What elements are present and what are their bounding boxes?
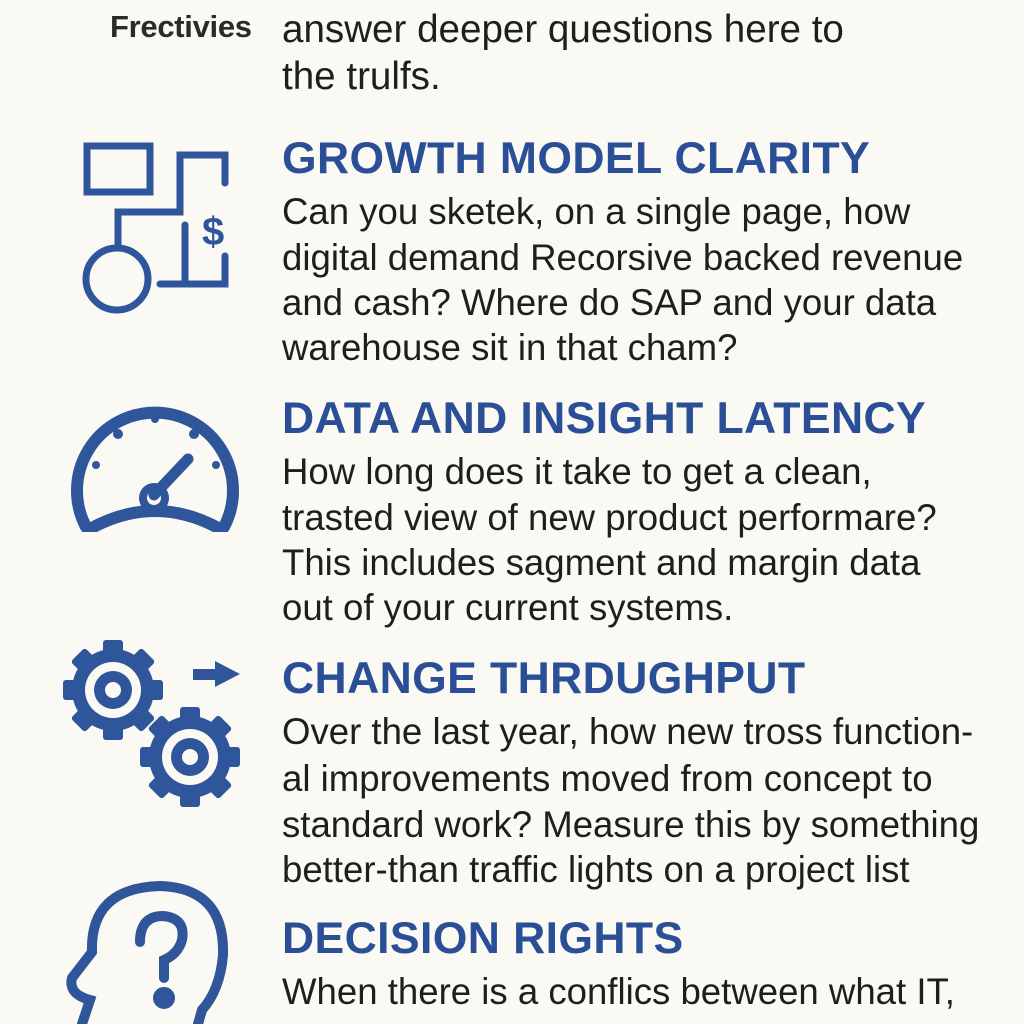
icon: gears with arrow xyxy=(63,640,240,807)
body text xyxy=(282,711,979,890)
icon: growth model diagram xyxy=(82,142,228,314)
icon: growth model diagram: $ xyxy=(202,210,224,254)
intro text: answer deeper questions here to xyxy=(282,8,844,51)
body text: standard work? Measure this by something xyxy=(282,804,979,845)
body text: Can you sketek, on a single page, how xyxy=(282,191,910,232)
body text: When there is a conflics between what IT, xyxy=(282,971,955,1012)
panel: decision rights xyxy=(282,914,955,1012)
body text xyxy=(282,191,963,368)
heading: CHANGE THRDUGHPUT xyxy=(282,654,805,703)
body text: al improvements moved from concept to xyxy=(282,758,933,799)
panel: change throughput xyxy=(282,654,979,890)
heading: GROWTH MODEL CLARITY xyxy=(282,134,870,183)
body text: better-than traffic lights on a project list xyxy=(282,849,910,890)
body text: out of your current systems. xyxy=(282,587,733,628)
intro text: the trulfs. xyxy=(282,55,441,98)
icon: speedometer xyxy=(71,406,239,532)
body text: This includes sagment and margin data xyxy=(282,542,920,583)
body text: warehouse sit in that cham? xyxy=(282,327,737,368)
body text: trasted view of new product performare? xyxy=(282,497,937,538)
body text xyxy=(282,451,937,628)
heading: DECISION RIGHTS xyxy=(282,914,684,963)
body text: and cash? Where do SAP and your data xyxy=(282,282,936,323)
panel: growth model clarity xyxy=(282,134,963,368)
heading: DATA AND INSIGHT LATENCY xyxy=(282,394,926,443)
icon: head with question mark xyxy=(66,881,228,1024)
body text: How long does it take to get a clean, xyxy=(282,451,872,492)
intro text xyxy=(110,8,844,98)
body text: digital demand Recorsive backed revenue xyxy=(282,237,963,278)
panel: data and insight latency xyxy=(282,394,937,628)
intro text: Frectivies xyxy=(110,9,252,44)
body text: Over the last year, how new tross function- xyxy=(282,711,973,752)
